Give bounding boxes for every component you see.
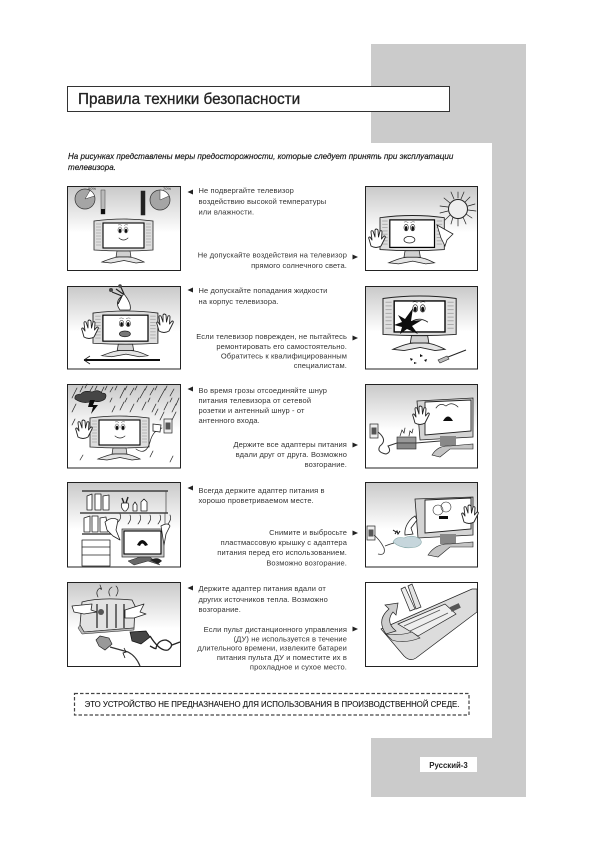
- battery cover: [386, 632, 420, 642]
- icon: lightning: [88, 400, 98, 414]
- text: high temperature warning: [188, 186, 326, 216]
- icon: smoke left: [72, 604, 97, 614]
- icon: wall socket: [367, 526, 375, 540]
- panel: temperature and humidity: 90%: [88, 186, 96, 191]
- icon: humidity pie left: [75, 189, 95, 209]
- text: remove plastic cover: Возможно возгорание.: [266, 558, 347, 568]
- icon: thermometer high: [141, 191, 145, 215]
- panel: broken screen: [366, 286, 478, 369]
- text: adapters apart: Держите все адаптеры питания: [233, 440, 347, 449]
- panel: ventilation: [68, 482, 180, 567]
- text: high temperature warning: или влажности.: [198, 208, 254, 216]
- panel: plastic cover: [366, 482, 478, 567]
- text: do not repair: специалистам.: [294, 361, 347, 370]
- text: ventilation: хорошо проветриваемом месте.: [198, 496, 314, 505]
- gray page frame: [371, 44, 526, 797]
- text: liquid warning: на корпус телевизора.: [198, 297, 279, 306]
- icon: smoke cloud right: [161, 524, 170, 545]
- steam: [118, 514, 171, 524]
- icon: pointing hand: [405, 516, 417, 535]
- text: adapters apart: вдали друг от друга. Возможно: [236, 450, 347, 459]
- icon: shielding hand: [437, 225, 453, 246]
- panel: temperature and humidity: [68, 186, 180, 270]
- panel: remote control: [366, 582, 478, 666]
- cord and plug: [136, 424, 162, 451]
- icon: smoke right: [125, 604, 146, 618]
- panel: direct sunlight: [366, 186, 478, 270]
- intro text: На рисунках представлены меры предосторожности, которые следует принять при эксплуатации: [68, 152, 454, 161]
- television: winking: [90, 416, 149, 460]
- cord: [374, 535, 394, 554]
- cords: [378, 432, 440, 454]
- text: remote control batteries: (ДУ) не используется в течение: [234, 634, 347, 644]
- icon: hand: [369, 229, 385, 248]
- television: worried: [93, 311, 158, 357]
- icon: humidity pie right: [150, 190, 170, 210]
- arrow: removal direction: [382, 603, 398, 634]
- text: high temperature warning: Не подвергайте телевизор: [198, 186, 294, 195]
- text: do not repair: [196, 332, 358, 370]
- steam: [97, 585, 118, 597]
- title: Правила техники безопасности: [78, 91, 300, 108]
- text: heat sources warning: [188, 584, 328, 614]
- text: sunlight warning: прямого солнечного света.: [251, 261, 347, 270]
- television: cracked: [383, 296, 456, 351]
- text: do not repair: ремонтировать его самостоятельно.: [216, 342, 347, 351]
- icon: hand: [413, 406, 429, 424]
- text: sunlight warning: Не допускайте воздействия на телевизор: [198, 250, 347, 260]
- icon: left hand: [82, 320, 98, 338]
- text: remove plastic cover: [217, 528, 358, 568]
- text: remove plastic cover: пластмассовую крышку с адаптера: [221, 538, 348, 547]
- television: sad: [380, 216, 444, 264]
- text: thunderstorm warning: питания телевизора от сетевой: [198, 396, 311, 405]
- icon: plastic cover: [393, 536, 421, 548]
- rain: [72, 384, 179, 462]
- callout: not for industrial use: [74, 694, 469, 715]
- icon: left hand: [76, 420, 92, 438]
- text: liquid warning: Не допускайте попадания жидкости: [198, 286, 327, 295]
- callout: not for industrial use: ЭТО УСТРОЙСТВО НЕ ПРЕДНАЗНАЧЕНО ДЛЯ ИСПОЛЬЗОВАНИЯ В ПРОИЗВОДСТВЕННОЙ СРЕДЕ.: [85, 700, 459, 709]
- title: [68, 86, 450, 112]
- page number: Русский-3: [429, 761, 468, 770]
- television: side view: [415, 497, 473, 557]
- text: thunderstorm warning: антенного входа.: [198, 416, 260, 425]
- text: ventilation: Всегда держите адаптер питания в: [198, 486, 325, 495]
- television: overheated: [122, 529, 164, 565]
- text: heat sources warning: возгорание.: [198, 605, 241, 614]
- text: remote control batteries: питания пульта ДУ и поместите их в: [217, 653, 347, 662]
- icon: adapter on cord: [130, 631, 180, 650]
- icon: wall socket: [164, 419, 172, 433]
- text: heat sources warning: Держите адаптер питания вдали от: [198, 584, 326, 593]
- icon: thermometer low: [101, 190, 105, 214]
- text: thunderstorm warning: [188, 386, 327, 425]
- panel: liquid on the television: [68, 284, 180, 369]
- text: remove plastic cover: Снимите и выбросьте: [269, 528, 347, 537]
- text: adapters apart: [233, 440, 358, 469]
- text: heat sources warning: других источников тепла. Возможно: [198, 595, 328, 604]
- text: do not repair: Если телевизор поврежден, не пытайтесь: [196, 332, 347, 341]
- icon: adapters: [397, 428, 416, 449]
- panel: heat sources: [68, 582, 180, 666]
- panel: thunderstorm: [68, 384, 180, 468]
- panel: adapters: [366, 384, 478, 468]
- intro text: [68, 152, 454, 172]
- text: do not repair: Обратитесь к квалифицированным: [221, 352, 347, 360]
- icon: storm cloud: [75, 391, 106, 403]
- icon: smoke cloud left: [105, 518, 120, 540]
- text: liquid warning: [188, 286, 327, 306]
- text: remote control batteries: прохладное и сухое место.: [250, 662, 347, 672]
- icon: sparks: [393, 530, 400, 534]
- icon: right hand: [462, 505, 478, 524]
- television: smiling: [94, 219, 153, 263]
- icon: screwdriver: [438, 350, 466, 363]
- cables: [150, 558, 162, 564]
- table: [84, 356, 160, 364]
- text: thunderstorm warning: Во время грозы отсоединяйте шнур: [198, 386, 327, 395]
- icon: heater: [78, 599, 135, 634]
- icon: debris: [410, 354, 427, 364]
- text: ventilation: [188, 486, 325, 505]
- text: adapters apart: возгорание.: [305, 460, 347, 469]
- icon: right hand: [157, 314, 173, 332]
- text: remote control batteries: Если пульт дистанционного управления: [204, 625, 347, 634]
- text: sunlight warning: [198, 250, 358, 270]
- shelves: [80, 491, 168, 566]
- text: high temperature warning: воздействию высокой температуры: [198, 197, 326, 206]
- page number: [420, 757, 477, 772]
- intro text: телевизора.: [68, 163, 116, 172]
- text: remote control batteries: длительного времени, извлеките батареи: [197, 644, 347, 652]
- icon: damaged plug and cord: [96, 636, 140, 666]
- text: thunderstorm warning: розетки и антенный шнур - от: [198, 406, 305, 415]
- text: remote control batteries: [197, 625, 358, 672]
- icon: remote control: [381, 589, 477, 660]
- icon: vase with flowers: [109, 284, 130, 310]
- television: side view: [417, 398, 473, 457]
- icon: batteries: [401, 584, 421, 611]
- panel: temperature and humidity: 70%: [163, 186, 171, 191]
- icon: crack: [394, 308, 422, 334]
- icon: wall socket: [370, 424, 378, 438]
- text: remove plastic cover: питания перед его использованием.: [217, 548, 347, 557]
- icon: sun: [440, 192, 476, 226]
